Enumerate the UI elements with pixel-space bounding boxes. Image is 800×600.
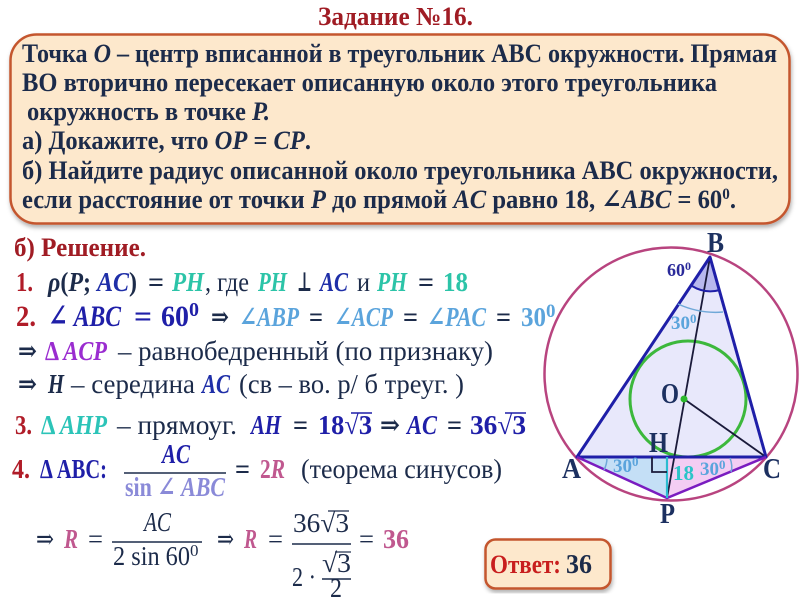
step 2	[16, 299, 556, 333]
label 30 degrees right: 0	[719, 457, 726, 472]
midpoint line	[18, 369, 464, 399]
step 1	[16, 267, 468, 297]
step 2: 60	[161, 300, 189, 333]
step 1: ρ(P; AC)	[47, 267, 137, 297]
solution heading: б) Решение.	[14, 233, 146, 262]
panel: problem statement: а) Докажите, что OP = CP.	[22, 126, 311, 155]
step 3: =	[293, 410, 308, 440]
radius calculation: 2 sin 60	[113, 541, 190, 571]
step 2: =	[496, 302, 511, 332]
angle arc C	[730, 458, 732, 472]
triangle HCP shading	[667, 457, 766, 498]
answer box: 36	[566, 549, 592, 579]
step 1: , где	[205, 267, 249, 297]
step 2: 0	[546, 301, 556, 322]
label B: B	[707, 227, 724, 259]
radius calculation: =	[88, 524, 103, 554]
triangle AHP shading	[577, 457, 667, 498]
segment BP	[667, 257, 710, 498]
midpoint line: (св – во. р/ б треуг. )	[239, 369, 464, 399]
step 2: ∠ACP	[334, 302, 393, 332]
radius calculation: ⇒	[217, 524, 234, 554]
step 4: sine theorem: AC	[160, 439, 191, 469]
step 3: ⇒	[380, 410, 400, 440]
label 30 degrees left: 0	[632, 454, 638, 469]
right angle mark	[652, 457, 667, 472]
midpoint line: – середина	[70, 369, 195, 399]
step 2: 0	[189, 299, 199, 321]
angle arc 60	[692, 286, 720, 291]
label 30 degrees right: 30	[700, 459, 719, 480]
step 3: AH	[249, 410, 282, 440]
step 4: sine theorem: Δ ABC:	[40, 454, 107, 484]
answer box	[486, 540, 610, 588]
label A: A	[562, 453, 581, 485]
midpoint line: AC	[200, 369, 231, 399]
title: Задание №16.	[318, 2, 473, 31]
answer box: Ответ:	[490, 550, 561, 579]
step 1: PH	[376, 267, 408, 297]
step 4: sine theorem: 4.	[12, 454, 30, 484]
step 2: 2.	[16, 300, 36, 333]
step 2: =	[403, 302, 418, 332]
midpoint line: ⇒	[18, 369, 37, 399]
angle B sector	[692, 257, 720, 291]
radius calculation: =	[359, 524, 374, 554]
segment OC	[684, 399, 766, 457]
step 1: =	[418, 267, 434, 297]
step 2: ∠PAC	[427, 302, 487, 332]
radius calculation: ⇒	[36, 524, 54, 554]
radius calculation: R	[243, 524, 257, 554]
step 1: PH	[171, 267, 205, 297]
radius calculation: √3	[322, 548, 351, 578]
circumscribed circle	[544, 248, 798, 500]
segments AP and CP	[577, 457, 766, 498]
point O	[680, 396, 688, 402]
step 4: sine theorem	[12, 439, 502, 502]
radius calculation: R	[63, 524, 78, 554]
step 2: ⇒	[211, 302, 229, 332]
label 60 degrees: 0	[685, 259, 691, 273]
step 3: 36√3	[470, 410, 526, 440]
step 1: PH	[257, 267, 288, 297]
angle arc A	[604, 458, 607, 470]
label 60 degrees: 60	[667, 260, 685, 280]
inscribed circle	[630, 341, 746, 457]
radius calculation: 36	[383, 524, 409, 554]
step 2: =	[309, 302, 323, 332]
radius calculation: 0	[190, 541, 198, 560]
step 3: =	[447, 410, 462, 440]
step 1: =	[148, 267, 164, 297]
panel: problem statement	[10, 34, 790, 224]
step 4: sine theorem: 2R	[260, 454, 285, 484]
step 4: sine theorem: (теорема синусов)	[301, 454, 502, 484]
step 2: ∠ ABC	[48, 300, 122, 333]
label 30 degrees left: 30	[613, 456, 632, 477]
step 1: AC	[318, 267, 349, 297]
label H: H	[649, 427, 668, 459]
step 4: sine theorem: =	[235, 454, 250, 484]
panel: problem statement: 0	[722, 186, 730, 203]
geometry diagram	[544, 227, 798, 530]
triangle ABC fill	[577, 257, 766, 457]
step 3: 18√3	[318, 410, 372, 440]
radius calculation	[36, 507, 409, 600]
label 30 degrees top: 30	[671, 313, 690, 334]
step 1: 18	[443, 267, 468, 297]
panel: problem statement: .	[730, 185, 736, 214]
step 3: Δ AHP	[41, 410, 107, 440]
radius calculation: 2 ·	[292, 562, 316, 592]
label C: C	[763, 453, 781, 485]
step 4: sine theorem: sin ∠ ABC	[125, 472, 226, 502]
radius calculation: AC	[142, 507, 172, 537]
isosceles triangle line: Δ ACP	[45, 336, 107, 366]
step 3: 3.	[15, 410, 32, 440]
midpoint line: H	[47, 369, 65, 399]
step 3	[15, 410, 526, 440]
label P: P	[660, 498, 675, 530]
label 18: 18	[673, 461, 694, 485]
step 2: 30	[521, 302, 546, 332]
step 2: =	[134, 300, 152, 333]
radius calculation: =	[268, 524, 283, 554]
isosceles triangle line: ⇒	[18, 336, 37, 366]
panel: problem statement: если расстояние от точки P до прямой AC равно 18, ∠ABC = 60	[22, 185, 725, 214]
step 1: и	[357, 267, 370, 297]
triangle ABC outline	[577, 257, 766, 457]
step 3: AC	[405, 410, 438, 440]
radius calculation: 36√3	[293, 508, 349, 538]
panel: problem statement: окружность в точке P.	[27, 97, 270, 126]
panel: problem statement: ВО вторично пересекает описанную около этого треугольника	[22, 68, 717, 97]
angle arc 30 top	[678, 304, 723, 312]
step 1: ⊥	[297, 267, 312, 297]
step 3: – прямоуг.	[116, 410, 237, 440]
label 30 degrees top: 0	[690, 311, 696, 326]
step 2: ∠ABP	[239, 302, 299, 332]
isosceles triangle line: – равнобедренный (по признаку)	[117, 336, 493, 366]
label O: O	[661, 378, 679, 410]
height PH	[666, 457, 668, 498]
step 1: 1.	[16, 267, 33, 297]
